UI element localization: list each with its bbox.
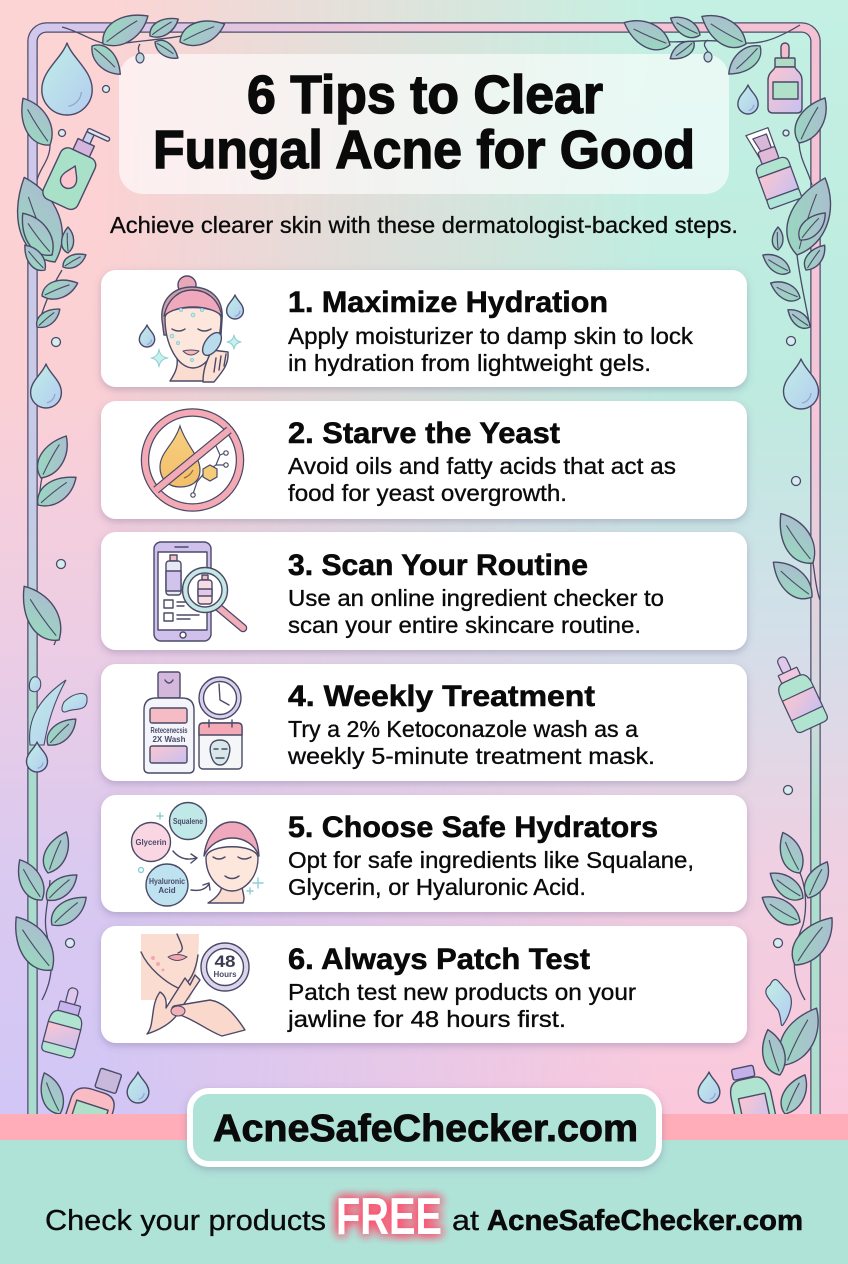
decorative frame	[32, 27, 816, 1114]
text 1: Apply moisturizer to damp skin to lock	[288, 323, 694, 349]
title panel	[119, 54, 729, 194]
leaves: top-right sprig and upper-right vine	[619, 7, 842, 607]
text 1 line 2: in hydration from lightweight gels.	[288, 350, 651, 376]
website button: AcneSafeChecker.com	[213, 1108, 638, 1150]
title text	[153, 65, 695, 180]
heading 3: 3. Scan Your Routine	[288, 549, 588, 582]
icon: ingredient bubbles and face: Hyaluronic	[149, 877, 185, 886]
icon: bottle bottom-left	[59, 1062, 125, 1150]
text 5 line 2: Glycerin, or Hyaluronic Acid.	[288, 874, 586, 900]
footer call to action: FREE	[336, 1188, 442, 1246]
icon: ingredient bubbles and face: Acid	[158, 886, 176, 895]
card 3	[101, 532, 747, 650]
icon: phone with magnifier	[154, 542, 243, 641]
leaves: lower-right vine	[756, 829, 842, 1118]
icon: wash bottle, clock and calendar	[144, 672, 242, 773]
heading 5: 5. Choose Safe Hydrators	[288, 811, 658, 844]
icon: jawline patch test with 48 hour timer	[141, 934, 249, 1036]
text 3: Use an online ingredient checker to	[288, 585, 664, 611]
icon: serum bottle top-right	[768, 43, 802, 113]
icon: wash bottle, clock and calendar: 2X Wash	[152, 735, 186, 744]
subtitle: Achieve clearer skin with these dermatologist-backed steps.	[110, 212, 738, 238]
text 5: Opt for safe ingredients like Squalane,	[288, 847, 694, 873]
heading 2: 2. Starve the Yeast	[288, 417, 560, 450]
icon: dropper bottle lower-left	[41, 984, 91, 1059]
footer call to action: Check your products	[45, 1205, 326, 1237]
water drops and bubbles around frame	[26, 43, 818, 1103]
card 6	[101, 926, 747, 1043]
heading 4: 4. Weekly Treatment	[288, 680, 595, 713]
title text: Fungal Acne for Good	[153, 120, 695, 180]
icon: dropper bottle right	[765, 650, 829, 734]
title text: 6 Tips to Clear	[247, 65, 603, 125]
text 4: Try a 2% Ketoconazole wash as a	[288, 716, 638, 742]
icon: no oil sign	[145, 412, 240, 508]
text 6: Patch test new products on your	[288, 979, 636, 1005]
icon: jawline patch test with 48 hour timer: 48	[214, 952, 236, 971]
icon: pump bottle top-left	[40, 122, 110, 212]
text 6 line 2: jawline for 48 hours first.	[287, 1006, 566, 1032]
card 1	[101, 270, 747, 387]
icon: ingredient bubbles and face	[132, 802, 263, 906]
icon: wash bottle, clock and calendar: Retecenecsis	[150, 726, 188, 735]
leaves: top-left sprig and left vine	[3, 5, 228, 649]
heading 1: 1. Maximize Hydration	[288, 286, 608, 319]
heading 6: 6. Always Patch Test	[288, 943, 590, 976]
leaves and water splash: lower-left vine	[3, 677, 110, 1118]
icon: ingredient bubbles and face: Glycerin	[136, 838, 167, 847]
card 2	[101, 401, 747, 519]
icon: ingredient bubbles and face: Squalene	[173, 817, 203, 826]
website button	[190, 1091, 659, 1164]
text 2: Avoid oils and fatty acids that act as	[288, 453, 676, 479]
icon: jawline patch test with 48 hour timer: Hours	[213, 970, 237, 979]
footer call to action: at	[452, 1205, 479, 1237]
text 3 line 2: scan your entire skincare routine.	[288, 612, 641, 638]
footer band	[0, 1114, 848, 1264]
footer call to action: AcneSafeChecker.com	[487, 1205, 803, 1237]
icon: airless pump bottle right	[743, 125, 802, 209]
text 4 line 2: weekly 5-minute treatment mask.	[287, 743, 655, 769]
card 4	[101, 664, 747, 781]
icon: bottle bottom-right	[725, 1063, 780, 1143]
text 2 line 2: food for yeast overgrowth.	[288, 480, 567, 506]
footer call to action	[45, 1188, 803, 1246]
icon: face with moisturizer pad	[139, 276, 243, 382]
card 5	[101, 795, 747, 912]
